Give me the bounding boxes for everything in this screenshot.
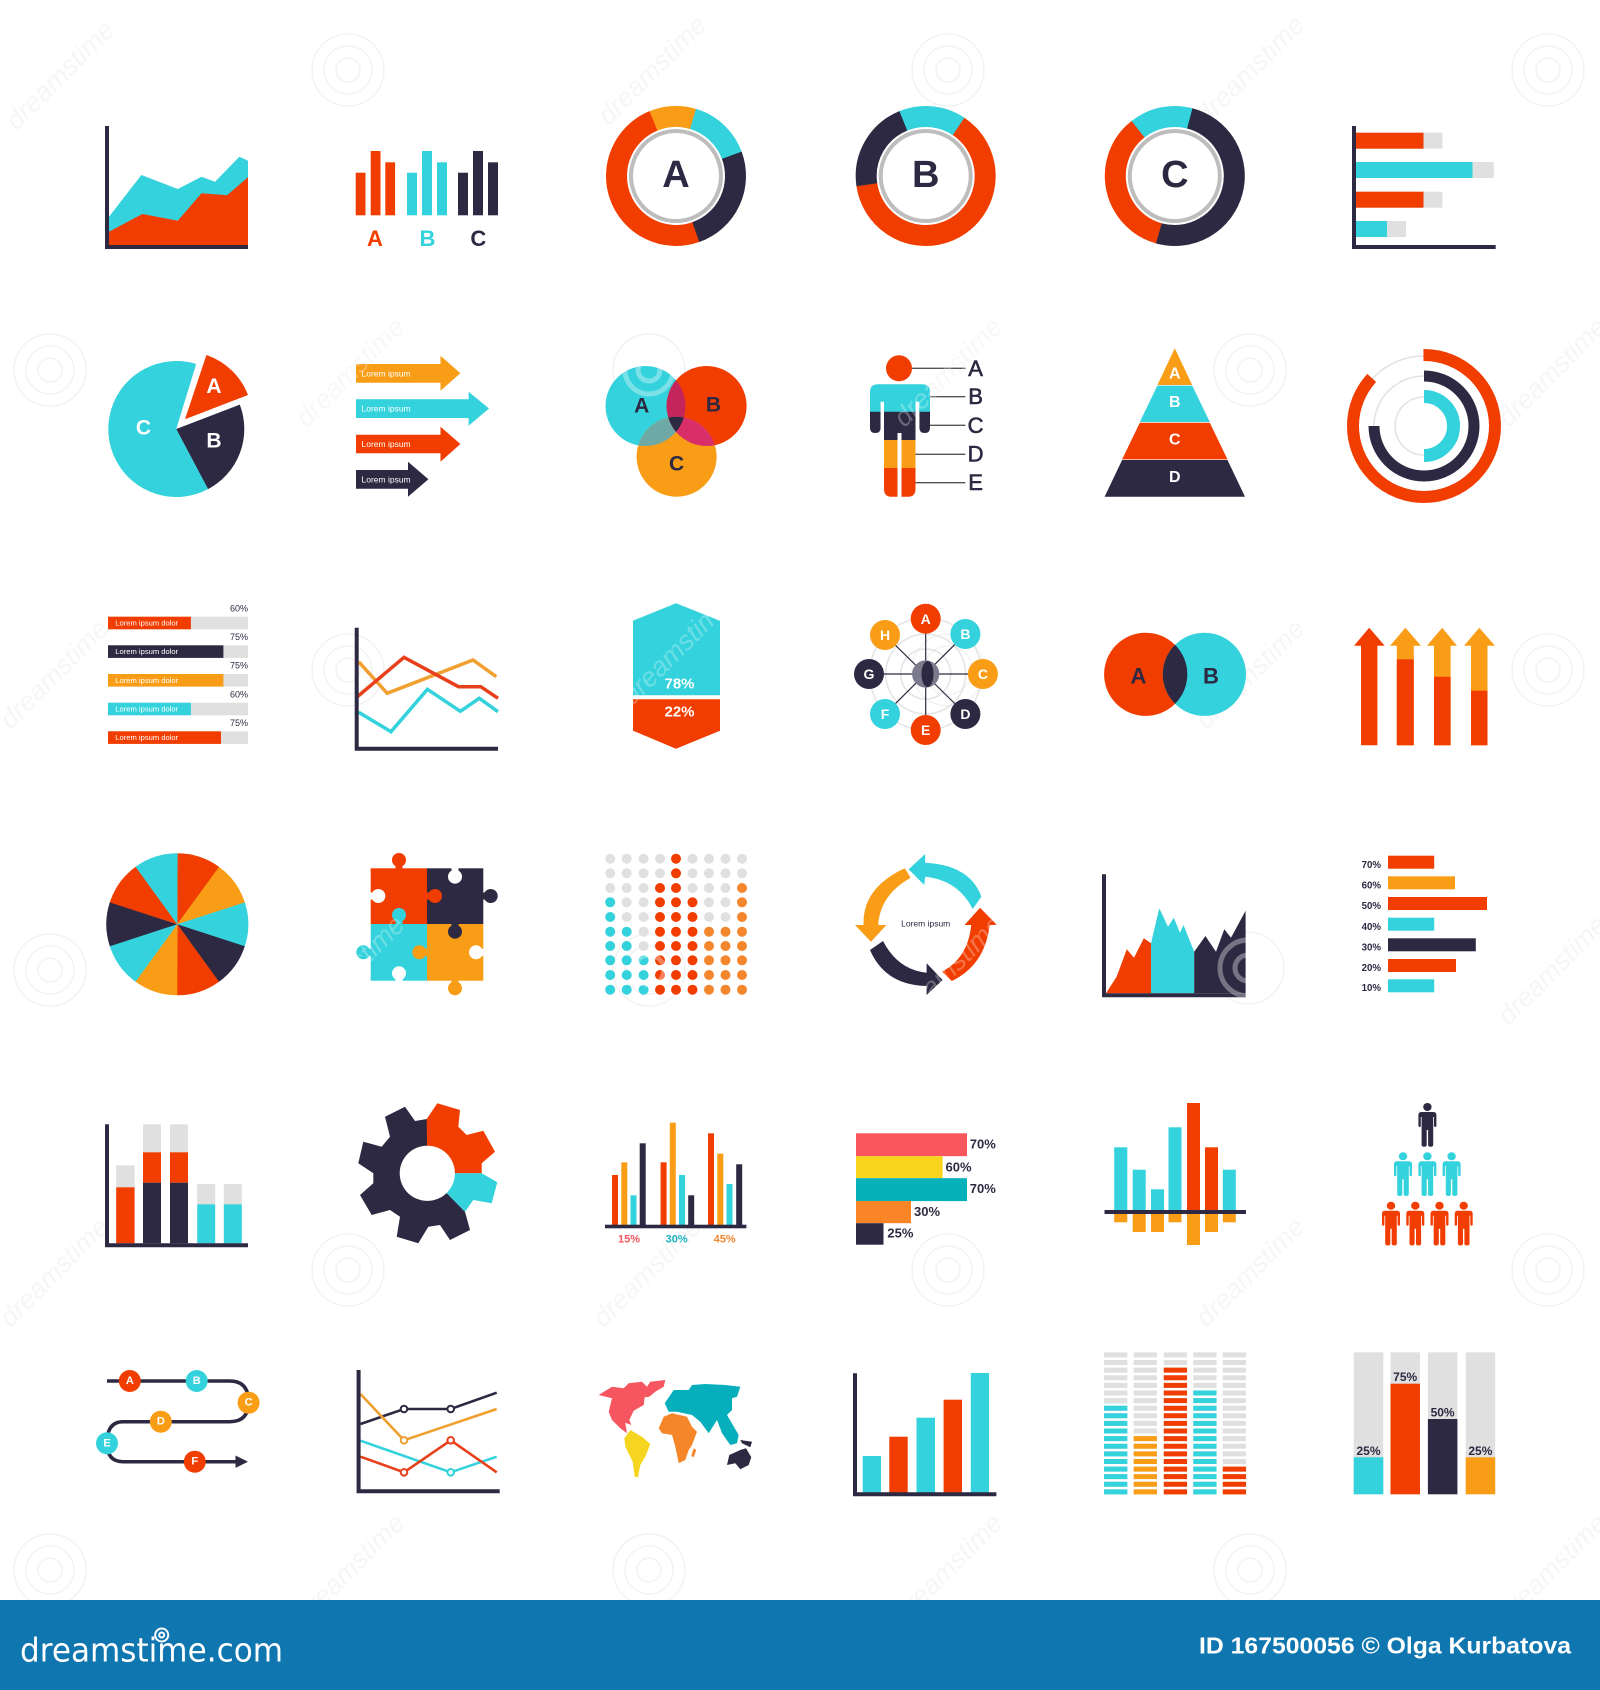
icon: horizontal progress bars [1354,126,1496,247]
icon: labelled progress bar list: Lorem ipsum dolor [115,618,179,628]
icon: hub and spoke network: C [978,666,988,682]
icon: pyramid chart: D [1169,469,1181,486]
icon: timeline path: F [191,1456,198,1468]
icon: circular cycle arrows [855,854,997,995]
icon: line chart with markers [359,1370,500,1491]
icon: jigsaw puzzle [356,853,498,995]
icon: three-circle venn diagram [606,366,747,497]
icon: growing bar chart [855,1373,996,1494]
icon: grouped thin bars with percentages: 15% [618,1233,640,1245]
footer banner [0,1600,1600,1690]
icon: hub and spoke network: E [921,722,930,738]
icon: stacked horizontal bars with percentages: 70% [970,1136,996,1152]
icon: timeline path: C [245,1397,253,1409]
icon: two-circle venn diagram: B [1203,664,1219,688]
watermark: background text: dreamstime [1190,1212,1310,1332]
icon: circular cycle arrows: Lorem ipsum [901,918,950,928]
watermark: foreground text over icons: dreamstime [888,312,1008,432]
icon: percentage horizontal bars: 50% [1362,901,1381,912]
footer logo: dreamstime.com: dreamstime.com [20,1631,283,1670]
watermark: background text: dreamstime [0,15,120,135]
icon: timeline path: E [103,1437,111,1449]
icon: stacked horizontal bars with percentages: 70% [970,1181,996,1196]
icon: percentage horizontal bars: 20% [1362,963,1381,974]
icon: labelled arrows: Lorem ipsum [362,404,411,414]
icon: donut B [843,93,1008,259]
icon: grouped thin bars with percentages: 45% [714,1233,736,1245]
icon: donut C: C [1161,154,1189,196]
icon: grouped bars A B C: B [419,226,435,251]
icon: grouped bars A B C: A [367,226,383,251]
watermark: background text: dreamstime [1190,614,1310,734]
icon: gear segmented chart [358,1103,497,1243]
icon: labelled progress bar list: Lorem ipsum dolor [115,733,179,742]
icon: dot matrix chart [605,854,747,995]
icon: stacked horizontal bars with percentages: 25% [887,1226,914,1240]
icon: labelled progress bar list: 60% [230,689,248,699]
icon: people hierarchy [1382,1103,1473,1245]
icon: donut B: B [912,154,939,196]
icon: exploded pie chart: B [206,430,222,452]
icon: three-circle venn diagram: C [669,452,684,476]
icon: hub and spoke network: D [960,706,970,722]
icon: labelled progress bar list: Lorem ipsum dolor [115,676,179,685]
icon: percentage column chart: 75% [1393,1370,1418,1384]
icon: hub and spoke network: B [960,626,970,642]
icon: labelled arrows: Lorem ipsum [362,368,411,378]
icon: human body callouts: C [968,413,984,438]
watermark: foreground text over icons: dreamstime [290,312,410,432]
icon: three-circle venn diagram: A [634,394,649,418]
icon: pyramid chart: B [1169,394,1181,411]
icon: world map [599,1380,752,1477]
icon: donut C [1091,92,1258,260]
icon: percentage column chart: 25% [1468,1444,1493,1458]
icon: human body callouts: D [968,442,984,466]
icon: labelled arrows: Lorem ipsum [362,474,411,484]
footer logo spiral [155,1628,168,1642]
icon: equalizer chart [1116,1352,1234,1494]
icon: percentage column chart: 25% [1356,1444,1381,1458]
icon: percentage tag: 78% [664,676,695,692]
icon: exploded pie chart [130,355,248,475]
icon: radial progress chart [1353,355,1495,497]
icon: percentage horizontal bars: 60% [1362,880,1381,892]
icon: exploded pie chart: A [206,375,222,398]
watermark: background text: dreamstime [592,10,712,130]
icon: human body callouts [870,355,984,497]
icon: grouped thin bars with percentages [605,1123,746,1245]
icon: hub and spoke network: H [880,627,890,643]
icon: hub and spoke network [854,604,998,745]
icon: human body callouts: E [968,470,983,495]
icon: hub and spoke network: G [864,666,875,682]
icon: labelled arrows [356,356,489,497]
icon: percentage tag: 22% [664,704,695,720]
icon: stacked bar chart [107,1124,248,1245]
icon: percentage horizontal bars [1362,856,1487,994]
icon: labelled arrows: Lorem ipsum [362,439,411,449]
icon: timeline path: D [157,1416,165,1428]
watermark: background text: dreamstime [290,312,410,432]
watermark: foreground text over icons [290,312,1008,1030]
icon: timeline path: A [126,1375,134,1387]
icon: percentage horizontal bars: 30% [1362,942,1381,954]
icon: percentage horizontal bars: 10% [1362,983,1381,994]
icon: two-circle venn diagram: A [1131,664,1147,688]
icon: donut A [599,99,753,253]
watermark: background text: dreamstime [1190,10,1310,130]
icon: stacked horizontal bars with percentages: 30% [914,1204,940,1219]
watermark: background text: dreamstime [587,1212,707,1332]
icon: percentage column chart: 50% [1431,1406,1455,1420]
icon: spiky area chart [1102,874,1246,998]
icon: percentage tag: dreamstime [616,590,736,710]
icon: pyramid chart [1105,348,1245,497]
icon: human body callouts: B [968,384,983,409]
icon: donut A: A [662,154,690,196]
icon: labelled progress bar list: 75% [230,661,248,671]
icon: labelled progress bar list: Lorem ipsum dolor [115,647,179,656]
icon: human body callouts: A [968,356,983,381]
icon: layered area chart [107,126,248,247]
icon: exploded pie chart: C [136,416,151,440]
watermark: background text: dreamstime [888,312,1008,432]
icon: pyramid chart: C [1169,432,1181,448]
icon: grouped bars A B C: C [470,226,486,251]
icon: ten-slice pie wheel [128,875,227,974]
icon: two-circle venn diagram [1104,633,1246,716]
icon: percentage horizontal bars: 70% [1362,860,1381,871]
icon: stacked horizontal bars with percentages: 60% [946,1160,972,1174]
icon: labelled progress bar list: 75% [230,718,248,728]
icon: timeline path [96,1370,260,1473]
icon: labelled progress bar list [108,603,248,744]
watermark: background text: dreamstime [290,1508,410,1628]
icon: labelled progress bar list: 75% [230,632,248,642]
icon: diverging bar chart [1104,1103,1246,1245]
icon: grouped bars A B C [356,151,498,251]
icon: three-circle venn diagram: B [706,394,721,416]
watermark: foreground text over icons: dreamstime [290,910,410,1030]
footer credit: ID 167500056 © Olga Kurbatova [1199,1632,1571,1658]
icon: multi-line chart [357,628,498,749]
icon: labelled progress bar list: 60% [230,603,248,613]
icon: upward arrows [1354,628,1495,745]
icon: labelled progress bar list: Lorem ipsum dolor [115,704,179,714]
icon: percentage column chart [1354,1352,1495,1494]
icon: stacked horizontal bars with percentages [856,1133,996,1245]
icon: grouped thin bars with percentages: 30% [666,1233,688,1245]
icon: percentage horizontal bars: 40% [1362,922,1381,933]
icon: hub and spoke network: A [921,611,931,627]
icon: pyramid chart: A [1169,366,1181,382]
watermark: background text: dreamstime [888,1508,1008,1628]
watermark: foreground text over icons: dreamstime [888,910,1008,1030]
icon: timeline path: B [193,1375,201,1387]
icon: hub and spoke network: F [881,706,890,722]
